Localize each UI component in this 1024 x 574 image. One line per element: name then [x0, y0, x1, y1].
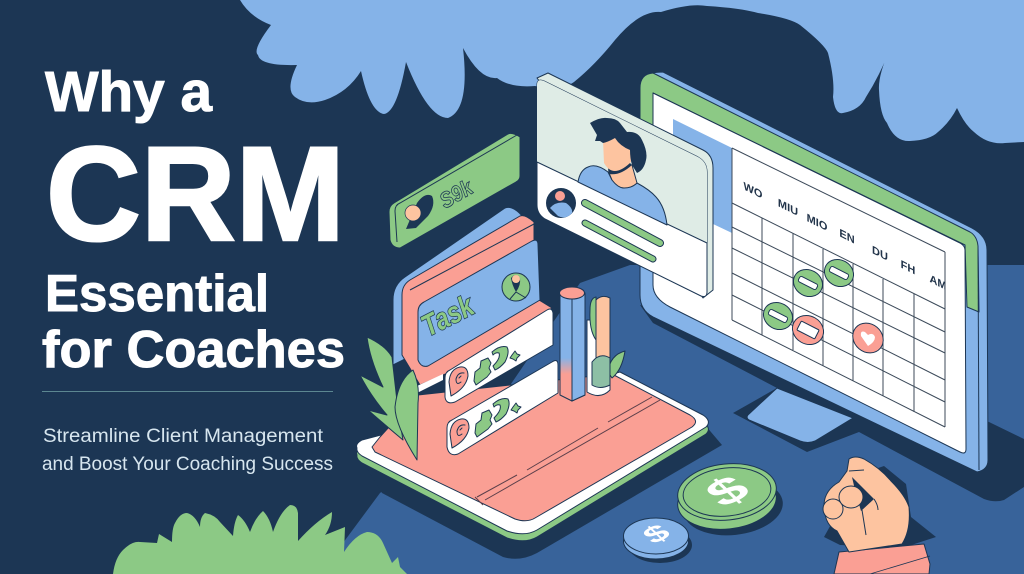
title line: Essential: Essential — [45, 265, 269, 323]
folder stack — [393, 207, 558, 455]
task label: Task — [416, 289, 480, 343]
dollar sign: $ — [636, 519, 677, 549]
title — [42, 60, 345, 379]
green badge 2 — [820, 254, 858, 292]
back blue folder — [393, 207, 523, 365]
day AM: AM — [929, 272, 947, 293]
monitor shadow — [640, 305, 1024, 501]
white strip — [417, 374, 443, 393]
title line: Why a: Why a — [45, 60, 213, 124]
calendar day labels — [744, 180, 947, 293]
white pot — [587, 320, 610, 396]
sleeve — [834, 544, 930, 574]
sage cup — [592, 356, 610, 388]
monitor stand — [747, 388, 853, 442]
tablet white top — [357, 372, 708, 534]
label text: S9k — [435, 174, 478, 213]
peach tube — [596, 296, 610, 385]
small leaf — [608, 351, 625, 378]
green badge 3 — [759, 297, 797, 335]
tablet shadow — [357, 425, 722, 559]
day MIO: MIO — [807, 211, 827, 234]
white task row 2 — [447, 361, 558, 455]
hand shadow — [824, 466, 936, 548]
monitor body — [640, 72, 988, 472]
card white panel — [537, 80, 707, 296]
card edge — [537, 73, 713, 298]
name bars — [585, 203, 660, 259]
first chart tube — [560, 287, 585, 401]
tablet crease lines — [475, 397, 660, 505]
label avatar — [405, 195, 433, 229]
row 1 icons — [449, 347, 520, 396]
green coin — [675, 459, 786, 540]
plant — [360, 337, 418, 460]
tablet base — [357, 372, 708, 541]
cloud shape — [240, 0, 1024, 143]
day FH: FH — [901, 258, 915, 277]
calendar grid — [732, 148, 945, 427]
hand — [823, 457, 936, 574]
hair and beard — [590, 118, 646, 174]
subtitle line 2: and Boost Your Coaching Success — [42, 454, 333, 475]
green task label — [389, 133, 520, 248]
title line: CRM: CRM — [46, 120, 345, 269]
monitor screen — [653, 93, 966, 453]
green leaf — [590, 297, 596, 340]
front leaf — [395, 370, 418, 460]
small avatar — [546, 188, 576, 218]
finger lines — [849, 470, 878, 535]
day MIU: MIU — [778, 197, 798, 219]
heart badge — [847, 317, 889, 359]
green badge 1 — [789, 264, 827, 302]
calendar event badges — [759, 254, 889, 359]
shirt — [578, 166, 667, 225]
subtitle — [42, 426, 333, 475]
task card — [416, 240, 540, 366]
client profile card — [537, 73, 713, 298]
neck — [608, 163, 637, 188]
dollar sign: $ — [695, 467, 760, 515]
monitor green frame — [640, 73, 979, 312]
card portrait background — [537, 80, 707, 243]
screen sidebar — [673, 119, 732, 233]
day WO: WO — [744, 180, 762, 202]
tablet green edge — [357, 379, 708, 541]
row 2 icons — [450, 399, 521, 448]
face — [603, 130, 632, 172]
finger gap — [852, 477, 874, 511]
title line: for Coaches: for Coaches — [42, 321, 345, 379]
back leaf — [360, 337, 403, 440]
monitor — [640, 72, 988, 472]
desk surface — [320, 265, 1024, 574]
blue coin — [624, 518, 692, 563]
tablet salmon surface — [372, 374, 696, 521]
pink badge — [787, 310, 829, 350]
task avatar — [502, 273, 530, 301]
white task row 1 — [445, 309, 553, 403]
person portrait — [578, 118, 667, 225]
palm — [824, 457, 909, 552]
day DU: DU — [872, 244, 888, 264]
second chart tube and plant — [587, 296, 625, 396]
salmon folder — [402, 216, 552, 385]
subtitle line 1: Streamline Client Management — [43, 426, 324, 447]
knuckle circles — [823, 486, 863, 519]
day EN: EN — [839, 227, 855, 247]
bush — [113, 505, 407, 574]
